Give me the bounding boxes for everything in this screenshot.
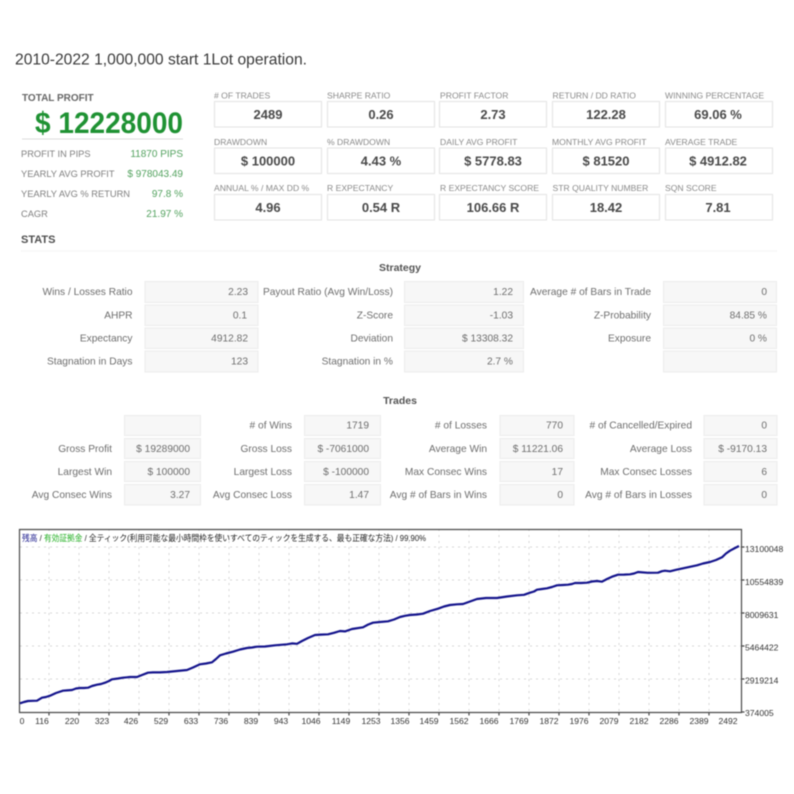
card: monthly avg profit — [552, 137, 660, 174]
x axis labels: 1046 — [301, 716, 321, 726]
trades row 3: $ 100000 — [148, 467, 190, 478]
card: return / dd ratio: RETURN / DD RATIO — [552, 90, 636, 100]
row: CAGR: 21.97 % — [146, 209, 183, 220]
row: CAGR: CAGR — [21, 209, 48, 219]
card: average trade: $ 4912.82 — [689, 154, 747, 168]
panel: key metric cards — [214, 90, 772, 220]
x axis labels: 529 — [154, 716, 168, 726]
trades row 1: 770 — [546, 420, 563, 432]
row: yearly avg % return: YEARLY AVG % RETURN — [21, 189, 130, 199]
total profit label: TOTAL PROFIT — [22, 93, 94, 104]
strategy row 3 — [80, 328, 776, 348]
trades row 4: 1.47 — [349, 490, 369, 501]
card: r expectancy — [327, 183, 434, 220]
trades row 1: # of Wins — [250, 420, 292, 432]
trades row 3: $ -100000 — [323, 467, 369, 478]
card: r expectancy score: R EXPECTANCY SCORE — [440, 183, 539, 193]
x axis labels: 323 — [95, 716, 109, 726]
trades row 1: 1719 — [346, 420, 369, 432]
x axis labels: 2389 — [689, 716, 709, 726]
card: daily avg profit: $ 5778.83 — [464, 154, 522, 168]
x axis labels: 839 — [244, 716, 258, 726]
strategy row 2 — [104, 305, 776, 326]
x axis labels: 2079 — [599, 716, 619, 726]
card: # of trades: # OF TRADES — [214, 90, 270, 100]
trades row 1: # of Cancelled/Expired — [589, 420, 692, 432]
strategy row 1: 0 — [761, 287, 767, 298]
trades row 3: Largest Win — [58, 467, 112, 478]
x axis labels: 943 — [274, 716, 288, 726]
card: sqn score: SQN SCORE — [665, 183, 717, 193]
x axis labels: 633 — [184, 716, 198, 726]
card: r expectancy score — [440, 183, 546, 220]
card: r expectancy: R EXPECTANCY — [327, 183, 393, 193]
y axis labels: 374005 — [745, 708, 774, 718]
card: average trade: AVERAGE TRADE — [665, 137, 738, 147]
y axis labels — [745, 544, 783, 718]
trades heading: Trades — [383, 395, 417, 407]
card: average trade — [665, 137, 772, 174]
trades row 3: 6 — [761, 467, 767, 478]
row: profit in pips — [21, 149, 183, 160]
x axis labels: 1976 — [569, 716, 589, 726]
row: profit in pips: PROFIT IN PIPS — [21, 149, 91, 159]
panel: equity line chart — [20, 529, 783, 726]
row: yearly avg profit: $ 978043.49 — [127, 169, 183, 180]
card: % drawdown — [327, 137, 434, 174]
strategy row 3: Expectancy — [80, 334, 133, 344]
trades row 3: Largest Loss — [234, 467, 292, 478]
card: return / dd ratio: 122.28 — [586, 107, 626, 122]
trades row 4: Avg Consec Wins — [32, 490, 112, 501]
strategy heading: Strategy — [379, 262, 421, 274]
card: annual % / max dd %: 4.96 — [255, 200, 281, 215]
card: winning percentage: WINNING PERCENTAGE — [665, 90, 764, 100]
trades row 3: Max Consec Losses — [600, 467, 692, 478]
x axis labels: 116 — [35, 716, 49, 726]
row: profit in pips: 11870 PIPS — [130, 149, 183, 160]
strategy row 2: Z-Probability — [594, 310, 652, 322]
title: 2010-2022 1,000,000 start 1Lot operation. — [15, 52, 307, 68]
card: drawdown — [214, 137, 322, 174]
card: r expectancy: 0.54 R — [362, 200, 401, 215]
card: r expectancy score: 106.66 R — [467, 200, 520, 215]
y axis labels: 5464422 — [745, 642, 779, 652]
strategy row 1: Average # of Bars in Trade — [530, 287, 651, 298]
strategy row 2: 0.1 — [233, 310, 247, 322]
y axis labels: 8009631 — [745, 610, 779, 620]
card: daily avg profit: DAILY AVG PROFIT — [440, 137, 518, 147]
strategy row 1: 1.22 — [493, 287, 513, 298]
trades row 2: $ 19289000 — [136, 444, 190, 455]
card: drawdown: DRAWDOWN — [214, 137, 267, 147]
trades row 2: Average Loss — [630, 444, 692, 455]
x axis labels: 1562 — [449, 716, 469, 726]
x axis labels: 1666 — [479, 716, 499, 726]
strategy row 4 — [47, 351, 776, 372]
chart frame — [20, 530, 744, 716]
trades row 3: Max Consec Wins — [405, 467, 487, 478]
panel: total profit summary — [21, 93, 183, 220]
card: monthly avg profit: $ 81520 — [582, 154, 630, 168]
trades row 4: 0 — [557, 490, 563, 501]
x axis labels: 736 — [214, 716, 228, 726]
y axis labels: 13100048 — [745, 544, 783, 554]
x axis labels: 1459 — [419, 716, 439, 726]
strategy row 1 — [42, 282, 776, 302]
card: drawdown: $ 100000 — [241, 154, 295, 168]
card: # of trades: 2489 — [254, 107, 282, 122]
panel: trades table — [32, 395, 777, 505]
row: yearly avg % return — [21, 189, 183, 200]
x axis labels: 0 — [20, 716, 25, 726]
card: # of trades — [214, 90, 322, 127]
trades row 2: $ 11221.06 — [513, 444, 563, 455]
card: profit factor: PROFIT FACTOR — [440, 90, 508, 100]
card: sharpe ratio: SHARPE RATIO — [327, 90, 391, 100]
panel: strategy table — [42, 262, 776, 372]
card: return / dd ratio — [552, 90, 660, 127]
trades row 1: 0 — [761, 420, 767, 432]
trades row 4: Avg # of Bars in Losses — [585, 490, 692, 501]
x axis labels — [20, 716, 738, 726]
trades row 2: $ -9170.13 — [718, 444, 767, 455]
row: CAGR — [21, 209, 183, 220]
trades row 4: 0 — [761, 490, 767, 501]
trades row 2: Gross Loss — [240, 444, 292, 455]
x axis labels: 1253 — [361, 716, 381, 726]
card: sharpe ratio — [327, 90, 434, 127]
strategy row 3: Deviation — [351, 334, 393, 344]
x axis labels: 2286 — [659, 716, 679, 726]
card: str quality number: STR QUALITY NUMBER — [552, 183, 648, 193]
trades row 4: Avg # of Bars in Wins — [390, 490, 487, 501]
trades row 4: 3.27 — [170, 490, 190, 501]
trades row 1: # of Losses — [435, 420, 487, 432]
card: str quality number: 18.42 — [590, 200, 622, 215]
trades row 1 — [124, 416, 777, 436]
strategy row 1: Payout Ratio (Avg Win/Loss) — [263, 287, 393, 298]
card: winning percentage: 69.06 % — [694, 107, 742, 122]
trades row 2: Gross Profit — [58, 444, 112, 455]
strategy row 3: Exposure — [608, 334, 651, 344]
strategy row 2: 84.85 % — [730, 310, 767, 322]
card: daily avg profit — [440, 137, 546, 174]
card: % drawdown: 4.43 % — [361, 154, 402, 168]
x axis labels: 2182 — [629, 716, 649, 726]
trades row 3: 17 — [552, 467, 563, 478]
strategy row 4: 2.7 % — [487, 356, 513, 368]
card: winning percentage — [665, 90, 772, 127]
card: profit factor — [440, 90, 546, 127]
trades row 4: Avg Consec Loss — [213, 490, 292, 501]
x axis labels: 2492 — [718, 716, 738, 726]
strategy row 1: Wins / Losses Ratio — [42, 287, 133, 298]
strategy row 2: Z-Score — [357, 310, 393, 322]
x axis labels: 1149 — [332, 716, 350, 726]
strategy row 1: 2.23 — [228, 287, 248, 298]
trades row 2: $ -7061000 — [317, 444, 369, 455]
trades row 2 — [58, 438, 777, 458]
trades row 3 — [58, 462, 777, 482]
equity curve — [20, 546, 739, 703]
trades row 4 — [32, 484, 777, 505]
row: yearly avg profit: YEARLY AVG PROFIT — [21, 169, 115, 179]
x axis labels: 1872 — [539, 716, 559, 726]
y axis labels: 2919214 — [745, 676, 779, 686]
trades row 2: Average Win — [429, 444, 487, 455]
y axis labels: 10554839 — [745, 577, 783, 587]
x axis labels: 1356 — [390, 716, 410, 726]
card: sqn score — [665, 183, 772, 220]
card: sharpe ratio: 0.26 — [368, 107, 394, 122]
chart legend: 残高 / 有効証拠金 / 全ティック(利用可能な最小時間枠を使いすべてのティックを生成する、最も正確な方法) / 99.90% — [22, 533, 427, 543]
total profit value: $ 12228000 — [35, 107, 183, 140]
strategy row 3: 4912.82 — [211, 334, 248, 344]
strategy row 4: 123 — [231, 356, 248, 368]
strategy row 3: 0 % — [749, 334, 767, 344]
strategy row 2: AHPR — [104, 310, 132, 322]
strategy row 4: Stagnation in Days — [47, 356, 132, 368]
row: yearly avg profit — [21, 169, 183, 180]
card: annual % / max dd %: ANNUAL % / MAX DD % — [214, 183, 310, 193]
card: str quality number — [552, 183, 660, 220]
stats heading: STATS — [21, 234, 55, 246]
x axis labels: 1769 — [509, 716, 529, 726]
strategy row 2: -1.03 — [490, 310, 513, 322]
card: sqn score: 7.81 — [705, 200, 731, 215]
strategy row 3: $ 13308.32 — [462, 334, 513, 344]
x axis labels: 426 — [124, 716, 138, 726]
card: monthly avg profit: MONTHLY AVG PROFIT — [552, 137, 647, 147]
card: annual % / max dd % — [214, 183, 322, 220]
card: profit factor: 2.73 — [480, 107, 506, 122]
card: % drawdown: % DRAWDOWN — [327, 137, 390, 147]
x axis labels: 220 — [65, 716, 79, 726]
row: yearly avg % return: 97.8 % — [152, 189, 183, 200]
strategy row 4: Stagnation in % — [322, 356, 393, 368]
